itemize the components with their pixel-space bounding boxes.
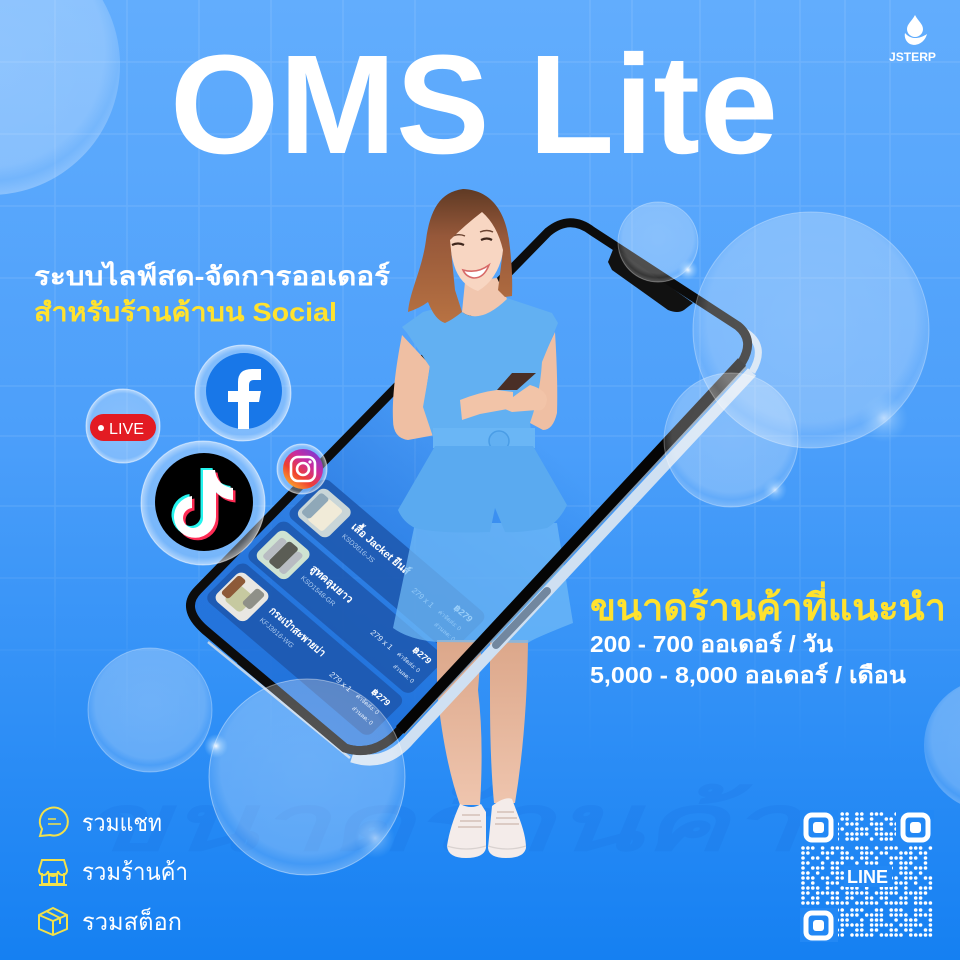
bubble: large right bbox=[693, 212, 929, 448]
icon: facebook bbox=[195, 345, 291, 441]
order row 2: ส่วนลด: 0 bbox=[391, 663, 416, 685]
dress top bbox=[402, 298, 558, 447]
bubble: mid right bbox=[664, 373, 798, 507]
order row 2: 279 x 1 bbox=[369, 628, 395, 652]
order row 3: กระเป๋าสะพายบ่า bbox=[266, 605, 329, 659]
store size recommendation: ขนาดร้านค้าที่แนะนำ bbox=[590, 581, 946, 628]
order row 1: ค่าจัดส่ง: 0 bbox=[436, 609, 463, 633]
order row 1: ส่วนลด: 0 bbox=[432, 621, 457, 643]
phone notch bbox=[608, 247, 693, 312]
feature: chat bbox=[40, 808, 162, 837]
icon: logo droplet bbox=[905, 15, 927, 45]
order row 1: ฿279 bbox=[452, 603, 475, 624]
order row 3 bbox=[204, 560, 406, 738]
face bbox=[450, 210, 504, 291]
subtitle: สำหรับร้านค้าบน Social bbox=[34, 297, 337, 327]
QR clear zones bbox=[800, 810, 934, 942]
order row 3: KFJ3616-WG bbox=[258, 617, 295, 650]
logo: JSTERP bbox=[889, 15, 936, 64]
bubble: top bbox=[618, 202, 698, 282]
order row 3: 279 x 1 bbox=[327, 670, 354, 694]
skirt, translucent over the phone bbox=[393, 523, 573, 643]
QR code bbox=[800, 810, 934, 942]
arms bbox=[393, 332, 557, 440]
feature: stock bbox=[39, 907, 182, 936]
bubble: right edge bbox=[924, 679, 960, 811]
order row 1 bbox=[286, 476, 488, 654]
bubble: lower left bbox=[88, 648, 212, 772]
hair bbox=[408, 189, 512, 323]
order row 3: ส่วนลด: 0 bbox=[350, 705, 375, 727]
feature: store bbox=[39, 859, 188, 886]
ghost background text: ขนาดร้านค้า bbox=[80, 779, 805, 867]
store size recommendation: 200 - 700 ออเดอร์ / วัน bbox=[590, 631, 833, 657]
QR code: LINE bbox=[847, 867, 888, 887]
order row 2: สูทคลุมยาว bbox=[307, 563, 355, 606]
icon: instagram bbox=[277, 444, 327, 494]
order row 2: ฿279 bbox=[410, 645, 434, 666]
order row 1: 279 x 1 bbox=[410, 586, 436, 610]
bubble: bottom bbox=[204, 679, 405, 875]
logo: JSTERP: JSTERP bbox=[889, 50, 936, 64]
feature: stock: รวมสต็อก bbox=[82, 907, 182, 936]
icon: live badge bbox=[86, 389, 160, 463]
peplum bbox=[398, 446, 567, 532]
order row 2 bbox=[245, 518, 447, 696]
icon: live badge: LIVE bbox=[109, 421, 144, 438]
order row 1: KSD3616-JS bbox=[340, 533, 376, 565]
title: OMS Lite bbox=[170, 25, 778, 183]
order row 3: ฿279 bbox=[369, 687, 393, 708]
bubble: top-left bbox=[0, 0, 120, 195]
order list on phone bbox=[202, 476, 489, 738]
phone: screen and frame bbox=[190, 223, 758, 758]
QR finder patterns bbox=[806, 815, 928, 938]
feature: chat: รวมแชท bbox=[82, 810, 162, 837]
woman holding phone bbox=[393, 189, 573, 858]
hands and held phone bbox=[460, 373, 547, 420]
order row 2: ค่าจัดส่ง: 0 bbox=[395, 651, 422, 675]
phone frame right edge over legs bbox=[240, 362, 752, 760]
subtitle bbox=[34, 260, 390, 327]
neck bbox=[462, 278, 507, 316]
order row 3: ค่าจัดส่ง: 0 bbox=[354, 693, 381, 717]
bubbles over the phone bbox=[88, 202, 960, 875]
store size recommendation: 5,000 - 8,000 ออเดอร์ / เดือน bbox=[590, 662, 906, 688]
order row 2: KSD1548-GR bbox=[299, 575, 336, 608]
subtitle: ระบบไลฟ์สด-จัดการออเดอร์ bbox=[34, 260, 390, 291]
order row 1: เสื้อ Jacket ยีนส์ bbox=[348, 519, 415, 577]
legs bbox=[437, 640, 528, 805]
icon: tiktok bbox=[141, 441, 265, 565]
smile and eyes bbox=[451, 230, 493, 278]
belt bbox=[433, 428, 535, 451]
feature: store: รวมร้านค้า bbox=[82, 859, 188, 886]
side button bbox=[496, 591, 547, 645]
store size recommendation bbox=[590, 581, 946, 688]
sneakers bbox=[447, 798, 526, 858]
